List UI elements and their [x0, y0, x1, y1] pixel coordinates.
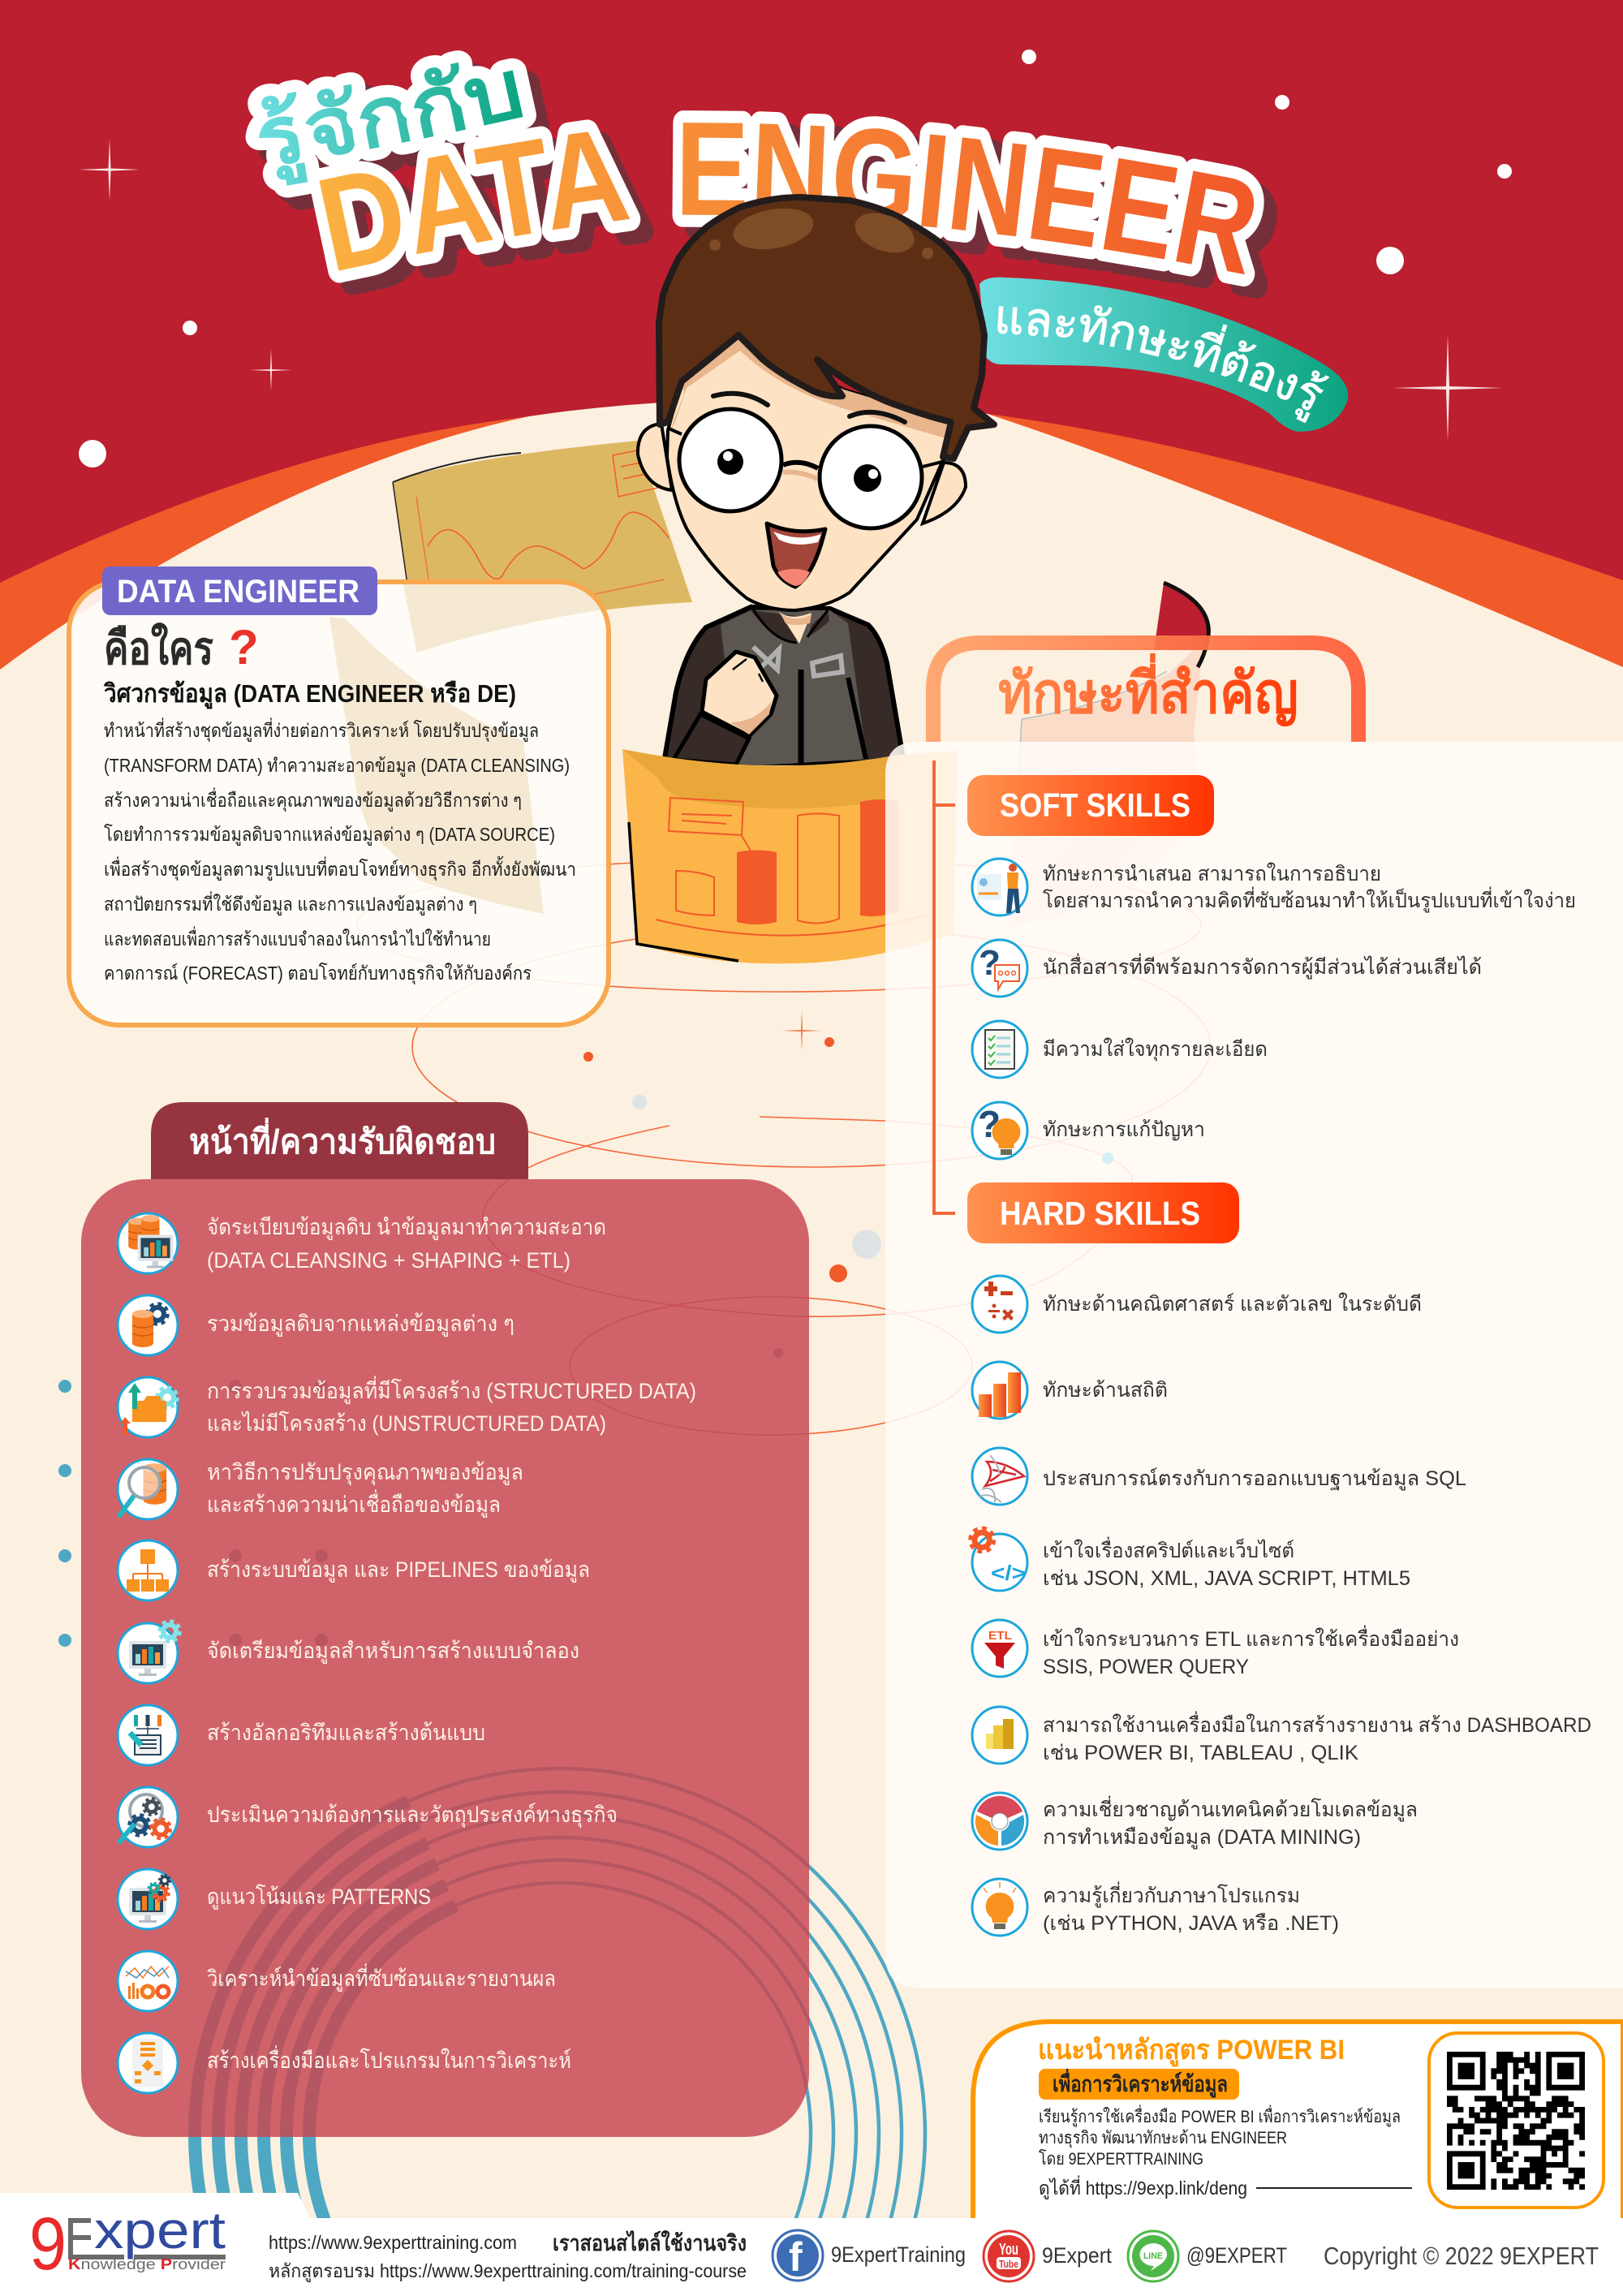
hard skill 2: ทักษะด้านสถิติ: [1043, 1379, 1168, 1402]
icon: gear and code: [971, 1528, 1027, 1591]
hard skill 5: เข้าใจกระบวนการ ETL และการใช้เครื่องมืออย่าง: [1043, 1625, 1459, 1651]
face: [667, 335, 951, 610]
icon: database with gear: [118, 1295, 178, 1355]
promo box: Power BI course: [973, 2022, 1623, 2224]
description paragraph: คาดการณ์ (FORECAST) ตอบโจทย์กับทางธุรกิจให้กับองค์กร: [104, 963, 532, 984]
item 3: การรวบรวมข้อมูลที่มีโครงสร้าง (STRUCTURED DATA): [207, 1376, 696, 1404]
soft skill 4: [972, 1102, 1205, 1159]
back panel: right pale sheet and red corner: [1008, 583, 1209, 926]
icon: presenter: [972, 859, 1027, 915]
logo: 9Expert: xpert: [94, 2201, 226, 2259]
icon: magnifier and gears: [118, 1787, 178, 1847]
social: youtube: 9Expert: [1042, 2243, 1112, 2268]
icon: bars: [972, 1362, 1027, 1419]
promo tag: [1039, 2068, 1239, 2100]
promo description: เรียนรู้การใช้เครื่องมือ POWER BI เพื่อการวิเคราะห์ข้อมูล: [1039, 2104, 1401, 2127]
hard skill 4: เช่น JSON, XML, JAVA SCRIPT, HTML5: [1043, 1567, 1410, 1590]
light blue dot: [1102, 1152, 1113, 1164]
hard skill 7: การทำเหมืองข้อมูล (DATA MINING): [1043, 1826, 1361, 1850]
glasses and eyes: [667, 409, 945, 528]
item 5: สร้างระบบข้อมูล และ PIPELINES ของข้อมูล: [207, 1557, 590, 1583]
item 6: จัดเตรียมข้อมูลสำหรับการสร้างแบบจำลอง: [207, 1639, 579, 1664]
icon: monitor with gear: [118, 1622, 180, 1683]
footer links: หลักสูตรอบรม https://www.9experttraining.com/training-course: [269, 2260, 747, 2282]
soft skill 3: [972, 1021, 1268, 1078]
soft skill 2: นักสื่อสารที่ดีพร้อมการจัดการผู้มีส่วนได้ส่วนเสียได้: [1043, 953, 1482, 980]
front panel: orange bar chart: [622, 749, 958, 963]
ears: [638, 424, 966, 523]
banner: และทักษะที่ต้องรู้: และทักษะที่ต้องรู้: [997, 305, 1329, 424]
icon: charts: [118, 1951, 178, 2011]
promo description: โดย 9EXPERTTRAINING: [1039, 2149, 1203, 2169]
item 4: และสร้างความน่าเชื่อถือของข้อมูล: [207, 1489, 501, 1518]
item 6: [118, 1622, 579, 1683]
hard skill 3: [972, 1448, 1466, 1505]
logo: 9Expert: Knowledge Provider: [68, 2256, 226, 2272]
background: orange arc: [0, 403, 1623, 812]
title word: ENGINEER: ENGINEER: [672, 110, 1277, 299]
connector between skill groups: [934, 760, 955, 1213]
hard skill 1: [972, 1276, 1422, 1333]
face shadow under hair: [670, 335, 951, 438]
hard skill 7: ความเชี่ยวชาญด้านเทคนิคด้วยโมเดลข้อมูล: [1043, 1795, 1418, 1822]
item 10: วิเคราะห์นำข้อมูลที่ซับซ้อนและรายงานผล: [207, 1963, 556, 1992]
icon: ETL funnel: ETL: [988, 1629, 1012, 1643]
promo description: [1039, 2104, 1401, 2199]
logo: 9Expert: 9: [29, 2203, 67, 2285]
jacket: [664, 605, 904, 767]
item 7: [118, 1705, 485, 1765]
icon: question and bulb: ?: [978, 1103, 1001, 1145]
icon: gear and code: </>: [991, 1561, 1026, 1585]
item 4: [118, 1459, 523, 1519]
item 1: [118, 1213, 606, 1273]
card border: [69, 582, 609, 1025]
title line: รู้จักกับ: รู้จักกับ: [245, 50, 549, 209]
sub heading: วิศวกรข้อมูล (DATA ENGINEER หรือ DE): [103, 679, 516, 709]
hard skill 6: สามารถใช้งานเครื่องมือในการสร้างรายงาน สร้าง DASHBOARD: [1043, 1711, 1591, 1737]
decorative stars and dots: [58, 50, 1512, 1647]
icon: people and document: [118, 1705, 178, 1765]
panel: responsibilities: [81, 1179, 809, 2137]
promo description: ทางธุรกิจ พัฒนาทักษะด้าน ENGINEER: [1039, 2129, 1287, 2148]
teal concentric rings: [195, 1768, 925, 2224]
description paragraph: ทำหน้าที่สร้างชุดข้อมูลที่ง่ายต่อการวิเคราะห์ โดยปรับปรุงข้อมูล: [104, 717, 539, 742]
description paragraph: สถาปัตยกรรมที่ใช้ดึงข้อมูล และการแปลงข้อมูลต่าง ๆ: [104, 891, 477, 915]
hard skill 8: (เช่น PYTHON, JAVA หรือ .NET): [1043, 1912, 1339, 1935]
icon: flowchart document: [118, 2033, 178, 2093]
hard skill 5: SSIS, POWER QUERY: [1043, 1656, 1249, 1678]
item 7: สร้างอัลกอริทึมและสร้างต้นแบบ: [207, 1721, 485, 1745]
icon: math symbols: [972, 1276, 1027, 1333]
social: facebook: f: [789, 2234, 803, 2280]
item 1: จัดระเบียบข้อมูลดิบ นำข้อมูลมาทำความสะอาด: [207, 1215, 606, 1240]
social: line: @9EXPERT: [1186, 2243, 1287, 2268]
item 1: (DATA CLEANSING + SHAPING + ETL): [207, 1248, 570, 1273]
social: facebook: 9ExpertTraining: [831, 2242, 966, 2267]
icon: question and speech bubble: ?: [979, 943, 1001, 983]
icon: power bi: [972, 1707, 1027, 1764]
item 3: [118, 1376, 696, 1437]
card: data engineer คือใคร: [69, 566, 609, 1025]
icon: monitor with small gears: [118, 1869, 178, 1929]
icon: sql server: [972, 1448, 1027, 1505]
social: line: LINE: [1143, 2251, 1163, 2261]
hard skill 3: ประสบการณ์ตรงกับการออกแบบฐานข้อมูล SQL: [1043, 1467, 1466, 1491]
button: HARD SKILLS: HARD SKILLS: [1000, 1195, 1200, 1232]
section frame: ทักษะที่สำคัญ: [933, 643, 1358, 742]
icon: databases and monitor: [118, 1213, 178, 1273]
mouth: [767, 523, 825, 587]
item 10: [118, 1951, 556, 2011]
button: SOFT SKILLS: SOFT SKILLS: [1000, 786, 1190, 824]
social: facebook: [773, 2230, 966, 2281]
tab: หน้าที่/ความรับผิดชอบ: หน้าที่/ความรับผิดชอบ: [189, 1118, 496, 1161]
footer links: เราสอนสไตล์ใช้งานจริง: [553, 2230, 747, 2255]
hard skill 4: [971, 1528, 1410, 1591]
hard skill 6: เช่น POWER BI, TABLEAU , QLIK: [1043, 1742, 1358, 1764]
jacket badges: [753, 647, 842, 676]
social: youtube: Tube: [999, 2258, 1018, 2270]
hard skill 5: [972, 1620, 1459, 1678]
icon: magnifier over database: [118, 1459, 178, 1519]
heading: คือใคร: คือใคร: [104, 622, 213, 674]
item 3: และไม่มีโครงสร้าง (UNSTRUCTURED DATA): [207, 1411, 606, 1436]
item 11: สร้างเครื่องมือและโปรแกรมในการวิเคราะห์: [207, 2045, 571, 2073]
item 2: รวมข้อมูลดิบจากแหล่งข้อมูลต่าง ๆ: [207, 1312, 514, 1337]
eyebrows: [713, 394, 905, 422]
soft skill 1: ทักษะการนำเสนอ สามารถในการอธิบาย: [1043, 862, 1381, 885]
button: SOFT SKILLS: [967, 775, 1214, 836]
item 9: ดูแนวโน้มและ PATTERNS: [207, 1885, 431, 1910]
item 4: หาวิธีการปรับปรุงคุณภาพของข้อมูล: [207, 1460, 523, 1486]
character: [638, 197, 994, 767]
title word: DATA: DATA: [312, 119, 654, 295]
soft skill 3: มีความใส่ใจทุกรายละเอียด: [1043, 1037, 1268, 1062]
icon: folder hierarchy: [118, 1540, 178, 1600]
hard skill 8: [972, 1879, 1339, 1936]
hard skill 1: ทักษะด้านคณิตศาสตร์ และตัวเลข ในระดับดี: [1043, 1292, 1422, 1316]
panel: skills background: [885, 742, 1623, 1988]
thin orange orbit lines: [357, 859, 1211, 1435]
back panel: tan line chart: [393, 441, 692, 653]
hard skill 4: เข้าใจเรื่องสคริปต์และเว็บไซต์: [1043, 1536, 1294, 1562]
item 5: [118, 1540, 590, 1600]
soft skill 2: [972, 940, 1482, 997]
social: youtube: [984, 2231, 1112, 2281]
hard skill 6: [972, 1707, 1591, 1764]
description paragraph: (TRANSFORM DATA) ทำความสะอาดข้อมูล (DATA CLEANSING): [104, 755, 570, 777]
sleeve and fist: [674, 652, 777, 765]
icon: folder and gear: [118, 1377, 178, 1437]
item 8: [118, 1787, 618, 1847]
soft skill 4: ทักษะการแก้ปัญหา: [1043, 1118, 1205, 1141]
description paragraph: โดยทำการรวมข้อมูลดิบจากแหล่งข้อมูลต่าง ๆ (DATA SOURCE): [104, 824, 555, 846]
section frame: ทักษะที่สำคัญ: ทักษะที่สำคัญ: [998, 653, 1298, 727]
item 2: [118, 1295, 514, 1355]
tab: DATA ENGINEER: DATA ENGINEER: [117, 574, 359, 610]
icon: checklist: [972, 1021, 1027, 1078]
hard skill 8: ความรู้เกี่ยวกับภาษาโปรแกรม: [1043, 1881, 1300, 1908]
pale sheet inside card: [329, 582, 609, 914]
promo tag: เพื่อการวิเคราะห์ข้อมูล: [1053, 2068, 1228, 2098]
soft skill 1: [972, 859, 1576, 915]
icon: question and bulb: [972, 1102, 1027, 1159]
hair: [659, 197, 994, 459]
question mark: ?: [229, 620, 259, 674]
social: line: [1128, 2231, 1287, 2281]
title: รู้จักกับ DATA ENGINEER: [245, 50, 1277, 299]
icon: question and speech bubble: [972, 940, 1027, 997]
footer band: [0, 2193, 1623, 2296]
icon: data mining wheel: [972, 1793, 1027, 1850]
description paragraph: [104, 717, 576, 984]
item 11: [118, 2033, 571, 2093]
QR frame: [1429, 2033, 1604, 2208]
description paragraph: และทดสอบเพื่อการสร้างแบบจำลองในการนำไปใช้ทำนาย: [104, 926, 491, 950]
description paragraph: สร้างความน่าเชื่อถือและคุณภาพของข้อมูลด้วยวิธีการต่าง ๆ: [104, 787, 522, 812]
logo: 9Expert: [29, 2201, 226, 2285]
tab: DATA ENGINEER: [102, 566, 377, 615]
button: HARD SKILLS: [967, 1182, 1239, 1243]
icon: light bulb: [972, 1879, 1027, 1936]
soft skill 1: โดยสามารถนำความคิดที่ซับซ้อนมาทำให้เป็นรูปแบบที่เข้าใจง่าย: [1043, 886, 1576, 913]
footer links: [269, 2230, 747, 2282]
social: youtube: You: [999, 2241, 1018, 2259]
hard skill 2: [972, 1362, 1168, 1419]
description paragraph: เพื่อสร้างชุดข้อมูลตามรูปแบบที่ตอบโจทย์ทางธุรกิจ อีกทั้งยังพัฒนา: [104, 856, 576, 881]
icon: ETL funnel: [972, 1620, 1027, 1677]
QR code: [1447, 2052, 1585, 2190]
tab: หน้าที่/ความรับผิดชอบ: [151, 1102, 528, 1180]
item 9: [118, 1869, 431, 1929]
item 8: ประเมินความต้องการและวัตถุประสงค์ทางธุรกิจ: [207, 1802, 618, 1829]
hard skill 7: [972, 1793, 1418, 1850]
promo description: ดูได้ที่ https://9exp.link/deng: [1039, 2175, 1247, 2199]
footer links: https://www.9experttraining.com: [269, 2232, 517, 2253]
promo heading: แนะนำหลักสูตร POWER BI: [1038, 2035, 1345, 2067]
